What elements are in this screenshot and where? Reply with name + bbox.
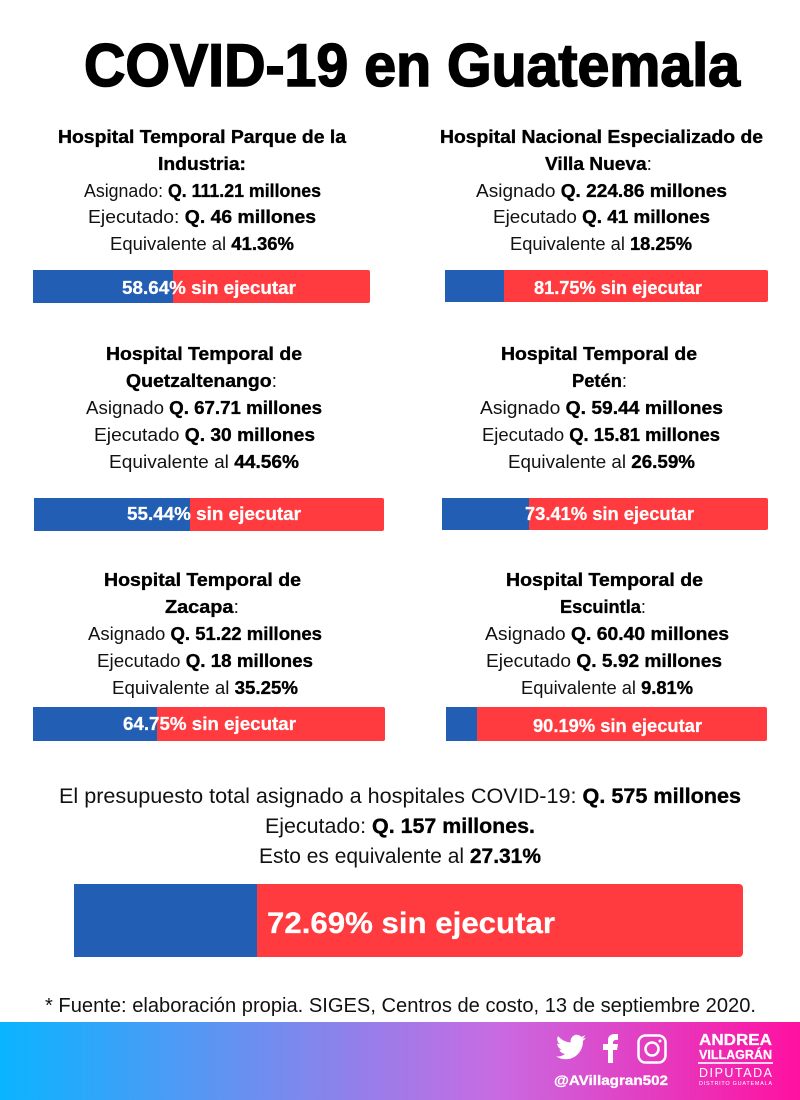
source note: * Fuente: elaboración propia. SIGES, Centros de costo, 13 de septiembre 2020. [45, 995, 756, 1017]
heading: Hospital Temporal de [506, 570, 703, 590]
summary text: El presupuesto total asignado a hospitales COVID-19: Q. 575 millones [59, 785, 741, 808]
figures: Asignado Q. 51.22 millones [88, 624, 322, 644]
summary text [59, 785, 741, 868]
progress bar: 55.44% sin ejecutar [127, 504, 301, 524]
figures: Ejecutado Q. 41 millones [493, 207, 710, 227]
panel: Hospital Temporal Parque de la Industria: Industria: [158, 154, 246, 174]
heading: Hospital Temporal Parque de la [58, 127, 347, 147]
progress bar [33, 707, 385, 741]
figures [476, 181, 727, 254]
figures: Ejecutado Q. 18 millones [97, 651, 313, 671]
panel: Hospital Temporal de Petén: Petén: [572, 371, 627, 391]
figures [86, 398, 322, 472]
figures [485, 624, 729, 698]
heading: Hospital Temporal de [104, 570, 301, 590]
summary text: Esto es equivalente al 27.31% [259, 845, 541, 868]
title: COVID-19 en Guatemala [84, 32, 741, 99]
figures: Ejecutado Q. 15.81 millones [482, 425, 720, 445]
figures: Asignado Q. 59.44 millones [480, 398, 723, 418]
panel: Hospital Temporal de Escuintla: Escuintla: [560, 597, 646, 617]
figures: Asignado Q. 67.71 millones [86, 398, 322, 418]
panel: Hospital Nacional Especializado de Villa Nueva: Villa Nueva : [545, 154, 652, 174]
figures: Equivalente al 18.25% [510, 234, 692, 254]
logo: Andrea Villagrán: ANDREA [699, 1032, 772, 1049]
figures: Equivalente al 35.25% [112, 678, 298, 698]
panel: Hospital Temporal de Zacapa: Zacapa : [165, 597, 239, 617]
panel: Hospital Temporal de Quetzaltenango [34, 344, 384, 531]
figures [84, 181, 321, 254]
progress bar [445, 270, 768, 302]
figures: Equivalente al 9.81% [521, 678, 693, 698]
panel: Hospital Temporal Parque de la Industria [33, 127, 370, 303]
icon: facebook [603, 1034, 618, 1063]
footer band [0, 1022, 800, 1100]
progress bar [33, 270, 370, 303]
progress bar: 81.75% sin ejecutar [534, 278, 702, 298]
figures: Equivalente al 44.56% [109, 452, 299, 472]
figures: Equivalente al 26.59% [508, 452, 695, 472]
figures: Asignado: Q. 111.21 millones [84, 181, 321, 201]
total progress bar [74, 884, 743, 957]
figures: Ejecutado Q. 5.92 millones [486, 651, 722, 671]
total progress bar: 72.69% sin ejecutar [267, 907, 555, 940]
figures [88, 624, 322, 698]
logo: Andrea Villagrán: DIPUTADA [699, 1066, 773, 1080]
progress bar [34, 498, 384, 531]
progress bar: 58.64% sin ejecutar [122, 278, 296, 298]
social handle: @AVillagran502 [554, 1072, 668, 1088]
panel: Hospital Temporal de Zacapa [33, 570, 385, 741]
heading: Hospital Temporal de [106, 344, 302, 364]
figures: Asignado Q. 60.40 millones [485, 624, 729, 644]
panel: Hospital Temporal de Quetzaltenango: Quetzaltenango : [126, 371, 277, 391]
progress bar [446, 707, 767, 741]
progress bar: 90.19% sin ejecutar [533, 716, 702, 736]
panel: total summary [59, 785, 743, 957]
heading: Hospital Nacional Especializado de [440, 127, 763, 147]
progress bar [442, 498, 768, 530]
summary text: Ejecutado: Q. 157 millones. [265, 815, 535, 838]
heading: Hospital Temporal de [501, 344, 697, 364]
progress bar: 64.75% sin ejecutar [123, 714, 296, 734]
panel: Hospital Nacional Especializado de Villa Nueva [440, 127, 768, 302]
figures: Equivalente al 41.36% [110, 234, 294, 254]
figures: Ejecutado: Q. 46 millones [88, 207, 316, 227]
logo: Andrea Villagrán [698, 1032, 773, 1087]
icon: instagram [638, 1036, 666, 1062]
panel: Hospital Temporal de Escuintla [446, 570, 767, 741]
logo: Andrea Villagrán: VILLAGRÁN [699, 1047, 772, 1062]
figures: Ejecutado Q. 30 millones [94, 425, 315, 445]
logo: Andrea Villagrán: DISTRITO GUATEMALA [699, 1081, 772, 1087]
figures: Asignado Q. 224.86 millones [476, 181, 727, 201]
progress bar: 73.41% sin ejecutar [525, 504, 694, 524]
icon: twitter [556, 1035, 586, 1059]
figures [480, 398, 723, 472]
panel: Hospital Temporal de Petén [442, 344, 768, 530]
